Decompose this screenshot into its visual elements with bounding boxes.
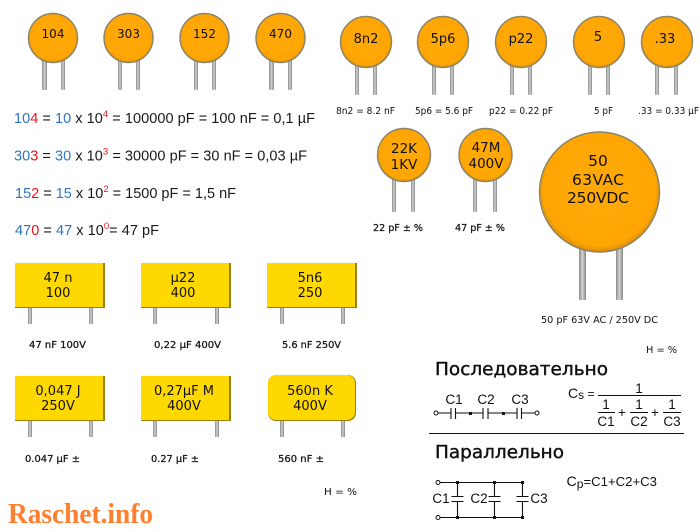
note H upper: H = % [646,345,677,356]
disc capacitor large 50 63VAC 250VDC: 50 [588,152,608,170]
equation 470: 0 [104,221,109,232]
series formula: + [618,405,626,420]
brand Raschet.info: Raschet.info [8,499,153,530]
disc capacitor 5p6: 5p6 [431,32,455,47]
parallel circuit diagram: C2 [470,491,488,506]
series formula: 1 [635,397,643,412]
series formula: C [568,385,578,401]
heading parallel: Параллельно [435,442,564,463]
film capacitor µ22 400: µ22 [171,271,195,286]
disc capacitor 104: 104 [42,27,64,41]
film capacitor µ22 400 [141,263,231,324]
parallel formula: p [577,477,584,491]
disc capacitor 22K 1KV [378,128,430,212]
disc capacitor 47M 400V: 400V [468,156,504,172]
film capacitor 0,27µF M 400V [141,376,231,437]
caption large disc: 50 pF 63V AC / 250V DC [541,315,658,326]
caption row: film values: 0,22 µF 400V [154,340,221,351]
series formula: = [584,387,594,401]
disc capacitor 104 [28,14,78,90]
series circuit diagram [434,392,539,419]
equation 104: = 100000 pF = 100 nF = 0,1 µF [108,111,315,127]
series formula: 1 [668,397,676,412]
film capacitor 5n6 250: 250 [298,286,322,301]
series circuit diagram: C1 [445,392,463,407]
equation 152: 2 [103,184,109,195]
equation 152: 152 = 15 x 10 [15,186,103,202]
film capacitor 47 n 100 [15,263,105,324]
film capacitor 47 n 100: 47 n [44,271,72,286]
equation 104: 4 [103,109,108,120]
caption 47 pF: 47 pF ± % [455,223,505,234]
equation 303: 303 = 30 x 10 [14,148,103,164]
disc capacitor 470: 470 [269,27,292,41]
disc capacitor 470 [256,14,305,90]
caption row: film tolerance: 0.047 µF ± [25,454,80,465]
equation 470: = 47 pF [109,223,159,239]
film capacitor 5n6 250: 5n6 [298,271,322,286]
parallel formula: C [566,473,577,489]
equation 152: = 1500 pF = 1,5 nF [109,186,236,202]
disc capacitor 47M 400V [459,128,512,212]
caption 22 pF: 22 pF ± % [373,223,423,234]
equation 303: 3 [103,146,108,158]
caption row: film values [29,340,341,351]
series formula: C2 [630,414,648,429]
series formula: + [651,405,659,420]
caption row: film values: 47 nF 100V [29,340,86,351]
equation 303: = 30000 pF = 30 nF = 0,03 µF [108,148,307,164]
caption row: film tolerance: 560 nF ± [278,454,324,465]
series formula [568,381,681,429]
disc capacitor p22: p22 [509,32,533,47]
film capacitor 0,047 J 250V: 250V [41,399,75,414]
disc capacitor 5 [574,16,624,95]
series formula: 1 [602,397,610,412]
heading series: Последовательно [435,359,608,380]
note H lower: H = % [324,487,357,498]
series circuit diagram: C3 [511,392,529,407]
parallel formula: =C1+C2+C3 [584,474,657,489]
caption row: marking values: p22 = 0.22 pF [489,106,553,117]
film capacitor 0,27µF M 400V: 0,27µF M [154,384,214,399]
disc capacitor 8n2 [340,16,392,95]
equation 104: 104 = 10 x 10 [14,111,103,127]
disc capacitor .33 [642,16,692,95]
disc capacitor large 50 63VAC 250VDC: 250VDC [567,189,629,207]
film capacitor 5n6 250 [267,263,357,324]
disc capacitor large 50 63VAC 250VDC: 63VAC [572,171,624,189]
disc capacitor 152 [180,14,229,90]
caption row: film values: 5.6 nF 250V [282,340,341,351]
caption row: film tolerance: 0.27 µF ± [151,454,199,465]
parallel circuit diagram [432,480,548,520]
series circuit diagram: C2 [477,392,495,407]
film capacitor 0,27µF M 400V: 400V [167,399,201,414]
caption row: marking values: 5 pF [594,106,613,117]
film capacitor 0,047 J 250V: 0,047 J [35,384,81,399]
disc capacitor 303: 303 [117,27,140,41]
caption row: marking values: 5p6 = 5.6 pF [415,106,473,117]
film capacitor 0,047 J 250V [15,376,105,437]
disc capacitor 303 [104,14,153,90]
disc capacitor 22K 1KV: 1KV [391,157,418,173]
disc capacitor 5: 5 [594,30,602,45]
film capacitor µ22 400: 400 [171,286,195,301]
series formula: C1 [597,414,615,429]
film capacitor 47 n 100: 100 [46,286,70,301]
series formula: s [578,388,584,402]
disc capacitor 5p6 [418,16,468,95]
parallel circuit diagram: C3 [530,491,548,506]
parallel circuit diagram: C1 [432,491,450,506]
caption row: film tolerance [25,454,324,465]
disc capacitor 47M 400V: 47M [472,140,500,156]
disc capacitor 22K 1KV: 22K [391,141,418,157]
caption row: marking values [336,106,699,117]
series formula: 1 [635,381,643,396]
disc capacitor p22 [496,16,546,95]
caption row: marking values: 8n2 = 8.2 nF [336,106,395,117]
series formula: C3 [663,414,681,429]
equation 470: 470 = 47 x 10 [15,223,104,239]
film capacitor 560n K 400V: 560n K [287,384,333,399]
disc capacitor large 50 63VAC 250VDC [540,132,660,300]
disc capacitor .33: .33 [655,32,675,47]
disc capacitor 8n2: 8n2 [354,32,378,47]
divider [429,433,684,434]
film capacitor 560n K 400V [268,375,356,437]
film capacitor 560n K 400V: 400V [293,399,327,414]
disc capacitor 152: 152 [193,27,216,41]
